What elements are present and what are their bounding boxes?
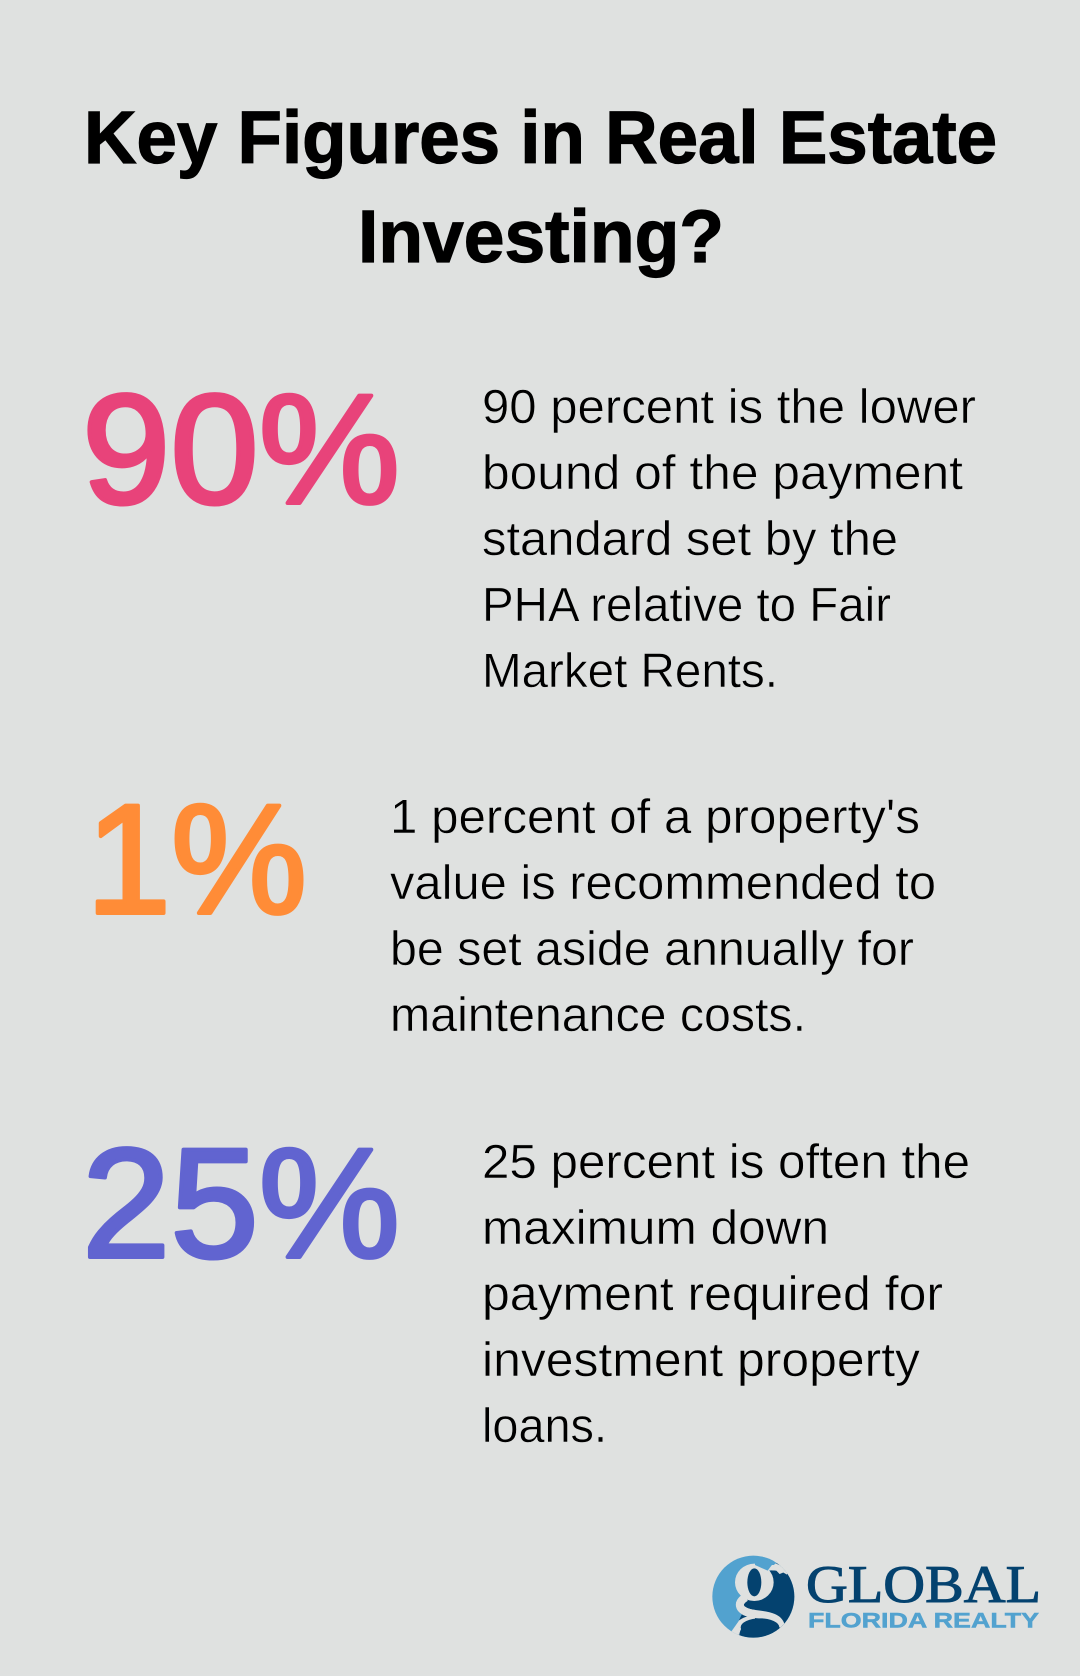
text block: 25 percent description: [482, 1136, 970, 1453]
text block: 90 percent description: PHA relative to Fair: [482, 579, 891, 632]
text block: 25 percent description: loans.: [482, 1400, 607, 1453]
icon: g in circle: [712, 1556, 794, 1638]
text block: 1 percent description: [390, 791, 936, 1042]
wordmark: FLORIDA REALTY: FLORIDA REALTY: [808, 1608, 1039, 1632]
logo: Global Florida Realty: [712, 1556, 1041, 1647]
stat number: 1%: 1%: [86, 773, 307, 947]
text block: 1 percent description: value is recommended to: [390, 857, 936, 910]
text block: 1 percent description: maintenance costs.: [390, 989, 806, 1042]
text block: 1 percent description: 1 percent of a property's: [390, 791, 920, 844]
text block: 90 percent description: standard set by the: [482, 513, 898, 566]
panel: 1 percent stat: [86, 773, 936, 1042]
panel: 25 percent stat: [82, 1117, 970, 1453]
text block: 25 percent description: maximum down: [482, 1202, 829, 1255]
title: [84, 96, 997, 278]
panel: 90 percent stat: [82, 363, 976, 698]
text block: 90 percent description: [482, 381, 976, 698]
text block: 1 percent description: be set aside annually for: [390, 923, 914, 976]
text block: 90 percent description: 90 percent is the lower: [482, 381, 976, 434]
wordmark: GLOBAL: GLOBAL: [806, 1556, 1041, 1614]
text block: 90 percent description: Market Rents.: [482, 645, 778, 698]
stat number: 90%: 90%: [82, 363, 400, 537]
title: Investing?: [358, 195, 724, 278]
text block: 25 percent description: payment required for: [482, 1268, 943, 1321]
text block: 25 percent description: investment property: [482, 1334, 920, 1387]
text block: 25 percent description: 25 percent is often the: [482, 1136, 970, 1189]
text block: 90 percent description: bound of the payment: [482, 447, 963, 500]
stat number: 25%: 25%: [82, 1117, 400, 1291]
title: Key Figures in Real Estate: [84, 96, 997, 179]
